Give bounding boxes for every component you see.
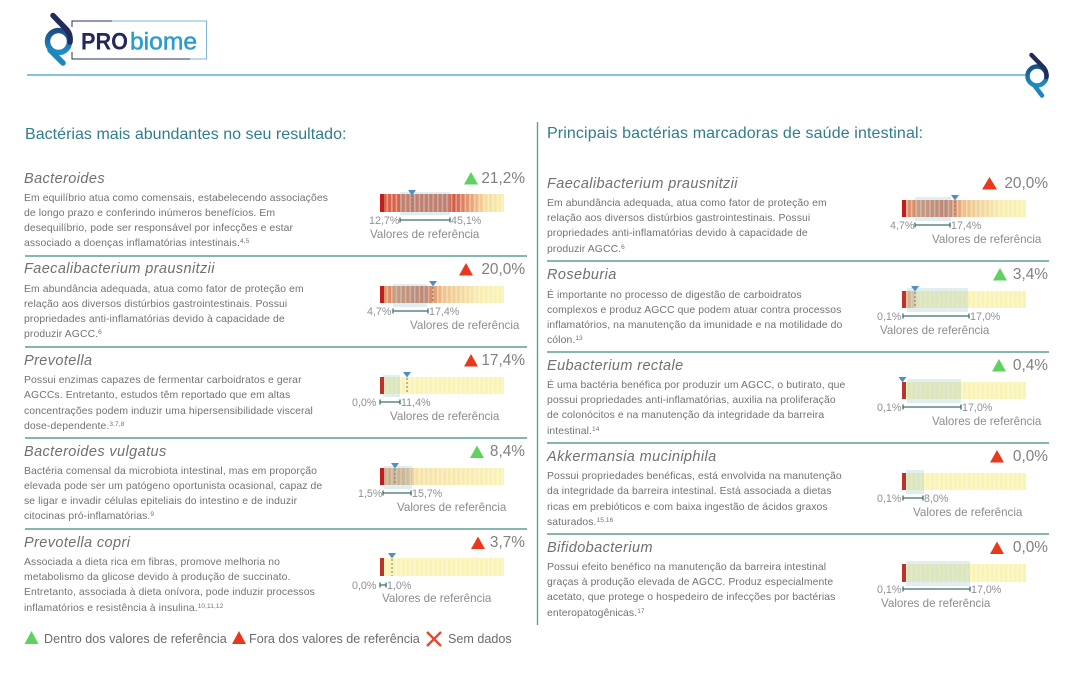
logo: PROBiome: biome xyxy=(130,28,197,56)
gauge bar: 15,7% xyxy=(412,488,443,500)
status: green triangle and value: 8,4% xyxy=(490,443,525,460)
gauge bar xyxy=(877,561,1026,610)
gauge bar: 0,0% xyxy=(352,397,377,409)
description: intestinal. xyxy=(547,426,592,437)
description: Possui enzimas capazes de fermentar carboidratos e gerar xyxy=(24,375,302,386)
description xyxy=(547,471,842,528)
status: green triangle and value xyxy=(470,443,525,460)
name: Roseburia xyxy=(547,267,617,283)
description: graças à produção elevada de AGCC. Produz especialmente xyxy=(547,577,833,588)
status: red triangle and value: 17,4% xyxy=(481,352,525,369)
description xyxy=(547,288,843,346)
description xyxy=(547,198,827,255)
description: 4,5 xyxy=(240,238,250,245)
description xyxy=(24,375,313,432)
description: associado a doenças inflamatórias intestinais. xyxy=(24,238,240,249)
description: enteropatogênicas. xyxy=(547,608,637,619)
gauge bar: Valores de referência xyxy=(382,592,492,605)
description xyxy=(547,562,835,619)
name: Bacteroides xyxy=(24,171,105,187)
gauge bar: Valores de referência xyxy=(913,506,1023,519)
logo: PROBiome xyxy=(48,16,206,63)
heading: left column: Bactérias mais abundantes no seu resultado: xyxy=(25,126,346,143)
gauge bar: 11,4% xyxy=(401,397,431,409)
description: propriedades anti-inflamatórias devido à capacidade de xyxy=(547,228,808,239)
name: Bacteroides vulgatus xyxy=(24,444,167,460)
name: Eubacterium rectale xyxy=(547,358,684,374)
description: 17 xyxy=(637,608,645,615)
status: green triangle and value: 21,2% xyxy=(481,170,525,187)
gauge bar: Valores de referência xyxy=(370,228,480,241)
panel: Faecalibacterium prausnitzii xyxy=(24,261,525,340)
description: 9 xyxy=(150,511,154,518)
gauge bar: 17,4% xyxy=(429,306,460,318)
description: produzir AGCC. xyxy=(24,329,98,340)
name: Prevotella copri xyxy=(24,535,131,551)
description: saturados. xyxy=(547,517,597,528)
description: relação aos diversos distúrbios gastrointestinais. Possui xyxy=(24,299,287,310)
gauge bar: Valores de referência xyxy=(410,319,520,332)
name: Akkermansia muciniphila xyxy=(546,449,717,465)
gauge bar: 8,0% xyxy=(924,493,949,505)
gauge bar: 0,1% xyxy=(877,584,902,596)
description: É uma bactéria benéfica por produzir um AGCC, o butirato, que xyxy=(547,378,845,391)
gauge bar: 1,0% xyxy=(387,580,412,592)
description: Entretanto, associada à dieta onívora, pode induzir processos xyxy=(24,587,315,598)
panel: Bacteroides vulgatus xyxy=(24,443,525,522)
gauge bar: 1,5% xyxy=(358,488,383,500)
description: Associada a dieta rica em fibras, promove melhoria no xyxy=(24,557,280,568)
description: metabolismo da glicose devido à produção de succinato. xyxy=(24,572,290,583)
gauge bar: 0,1% xyxy=(877,311,902,323)
gauge bar: Valores de referência xyxy=(881,597,991,610)
gauge bar: Valores de referência xyxy=(932,233,1042,246)
panel: Bacteroides xyxy=(24,170,525,249)
panel: Bifidobacterium xyxy=(547,539,1048,619)
name: Faecalibacterium prausnitzii xyxy=(24,261,215,277)
header rule xyxy=(27,74,1026,76)
description: Possui efeito benéfico na manutenção da barreira intestinal xyxy=(547,562,826,573)
legend text: inside range: Dentro dos valores de referência xyxy=(44,632,227,646)
status: green triangle and value xyxy=(992,357,1048,374)
gauge bar: 0,1% xyxy=(877,402,902,414)
description: dose-dependente. xyxy=(24,421,109,432)
legend text: no data: Sem dados xyxy=(448,632,512,646)
gauge bar xyxy=(877,470,1026,519)
description: inflamatórios e resistência à insulina. xyxy=(24,603,198,614)
description xyxy=(24,466,322,522)
status: red triangle and value: 3,7% xyxy=(490,534,525,551)
name: Prevotella xyxy=(24,353,92,369)
gauge bar: 45,1% xyxy=(451,215,482,227)
column divider xyxy=(536,122,538,625)
description: de colonócitos e na manutenção da integridade da barreira xyxy=(547,410,824,421)
description: É importante no processo de digestão de carboidratos xyxy=(547,288,802,301)
gauge bar: 17,0% xyxy=(962,402,993,414)
gauge bar: Valores de referência xyxy=(880,324,990,337)
status: red triangle and value: 20,0% xyxy=(481,261,525,278)
description: ricas em prebióticos e com baixa ingestão de ácidos graxos xyxy=(547,502,828,513)
gauge bar xyxy=(877,286,1026,337)
gauge bar: Valores de referência xyxy=(932,415,1042,428)
description: 3,7,8 xyxy=(109,421,125,428)
panel: Prevotella xyxy=(24,352,525,432)
legend xyxy=(24,631,512,646)
description: relação aos diversos distúrbios gastrointestinais. Possui xyxy=(547,213,810,224)
name: Faecalibacterium prausnitzii xyxy=(547,176,738,192)
gauge bar: 17,0% xyxy=(971,584,1002,596)
gauge bar: 4,7% xyxy=(367,306,392,318)
description: AGCCs. Entretanto, estudos têm reportado que em altas xyxy=(24,390,290,401)
status: red triangle and value xyxy=(990,448,1048,465)
status: green triangle and value xyxy=(993,266,1048,283)
gauge bar xyxy=(367,281,520,332)
icon: red triangle xyxy=(232,631,246,644)
description: cólon. xyxy=(547,335,575,346)
description: possui propriedades anti-inflamatórias, auxilia na proliferação xyxy=(547,395,836,406)
description: inflamatórios, na manutenção da imunidade e na motilidade do xyxy=(547,320,843,331)
description: Em abundância adequada, atua como fator de proteção em xyxy=(24,284,304,295)
icon: red cross xyxy=(427,632,441,646)
description xyxy=(24,193,328,249)
status: red triangle and value xyxy=(459,261,525,278)
gauge bar: 17,0% xyxy=(970,311,1001,323)
status: red triangle and value xyxy=(990,539,1048,556)
description: 6 xyxy=(621,244,625,251)
status: red triangle and value xyxy=(471,534,525,551)
gauge bar xyxy=(890,195,1042,246)
description: Em equilíbrio atua como comensais, estabelecendo associações xyxy=(24,193,328,204)
description: complexos e produz AGCC que podem atuar contra processos xyxy=(547,305,841,316)
description: elevada pode ser um patógeno oportunista ocasional, capaz de xyxy=(24,481,322,492)
panel: Akkermansia muciniphila xyxy=(546,448,1048,528)
icon: small logo mark xyxy=(1028,55,1047,96)
description: desequilíbrio, pode ser responsável por infecções e estar xyxy=(24,223,294,234)
description: 15,16 xyxy=(597,517,614,524)
description: 6 xyxy=(98,329,102,336)
name: Bifidobacterium xyxy=(547,540,653,556)
gauge bar xyxy=(352,553,504,605)
description: Bactéria comensal da microbiota intestinal, mas em proporção xyxy=(24,466,317,477)
gauge bar: 4,7% xyxy=(890,220,915,232)
legend text: outside range: Fora dos valores de referência xyxy=(249,632,420,646)
status: red triangle and value: 20,0% xyxy=(1004,175,1048,192)
panel: Eubacterium rectale xyxy=(547,357,1048,437)
description: 10,11,12 xyxy=(198,603,224,610)
logo: PROBiome: PRO xyxy=(81,28,128,56)
gauge bar xyxy=(352,372,504,423)
description: de longo prazo e conferindo inúmeros benefícios. Em xyxy=(24,208,275,219)
heading: right column: Principais bactérias marcadoras de saúde intestinal: xyxy=(547,125,923,142)
gauge bar: Valores de referência xyxy=(390,410,500,423)
gauge bar xyxy=(358,463,507,514)
description: da integridade da barreira intestinal. Está associada a dietas xyxy=(547,486,832,497)
status: red triangle and value xyxy=(982,175,1048,192)
panel: right Faecalibacterium prausnitzii xyxy=(547,175,1048,255)
description xyxy=(547,378,845,437)
description xyxy=(24,284,304,340)
status: red triangle and value: 0,0% xyxy=(1013,539,1048,556)
status: red triangle and value: 0,0% xyxy=(1013,448,1048,465)
icon: green triangle xyxy=(24,631,38,644)
status: green triangle and value: 3,4% xyxy=(1013,266,1048,283)
gauge bar: 0,0% xyxy=(352,580,377,592)
status: green triangle and value: 0,4% xyxy=(1013,357,1048,374)
description: acetato, que protege o hospedeiro de infecções por bactérias xyxy=(547,592,835,603)
panel: Roseburia xyxy=(547,266,1048,346)
description: produzir AGCC. xyxy=(547,244,621,255)
description: Possui propriedades benéficas, está envolvida na manutenção xyxy=(547,471,842,482)
description: 13 xyxy=(575,335,583,342)
description: concentrações podem induzir uma hipersensibilidade visceral xyxy=(24,406,313,417)
description: se ligar e invadir células epiteliais do intestino e de induzir xyxy=(24,496,298,507)
gauge bar: 0,1% xyxy=(877,493,902,505)
gauge bar: 17,4% xyxy=(951,220,982,232)
gauge bar xyxy=(877,377,1042,428)
gauge bar: Valores de referência xyxy=(397,501,507,514)
description xyxy=(24,557,315,614)
description: propriedades anti-inflamatórias devido à capacidade de xyxy=(24,314,285,325)
gauge bar xyxy=(369,190,504,241)
panel: Prevotella copri xyxy=(24,534,525,614)
description: 14 xyxy=(592,426,600,433)
description: Em abundância adequada, atua como fator de proteção em xyxy=(547,198,827,209)
gauge bar: 12,7% xyxy=(369,215,400,227)
description: citocinas pró-inflamatórias. xyxy=(24,511,150,522)
